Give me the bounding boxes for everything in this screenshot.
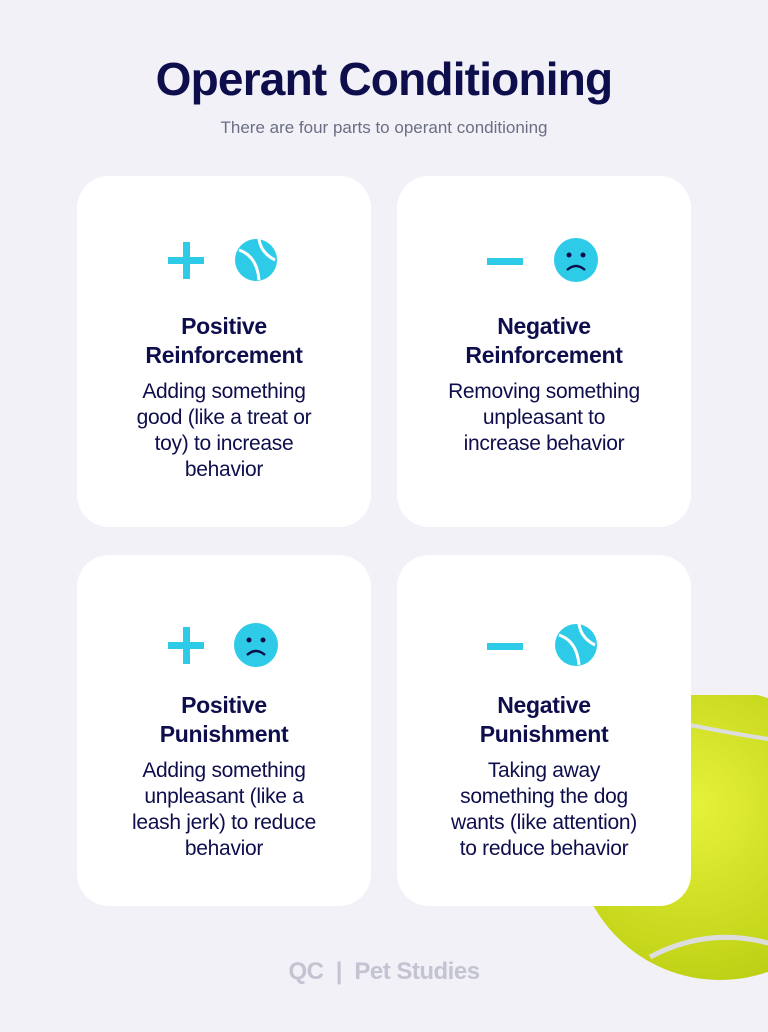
heading: Reinforcement [465, 342, 623, 368]
body text: behavior [185, 837, 263, 860]
body text [132, 759, 316, 860]
body text: increase behavior [464, 432, 624, 455]
body text: Taking away [488, 759, 600, 782]
decorative tennis ball [594, 695, 768, 980]
panel: positive punishment [77, 555, 371, 906]
icons: minus and ball [487, 624, 597, 666]
body text [137, 380, 312, 481]
heading [160, 692, 288, 747]
body text: behavior [185, 458, 263, 481]
panel: positive reinforcement [77, 176, 371, 527]
heading [480, 692, 608, 747]
body text: toy) to increase [155, 432, 293, 455]
panel: negative punishment [397, 555, 691, 906]
body text: Adding something [142, 759, 306, 782]
body text: leash jerk) to reduce [132, 811, 316, 834]
heading: Punishment [480, 721, 608, 747]
subtitle: There are four parts to operant conditioning [220, 118, 547, 137]
title: Operant Conditioning [156, 53, 612, 105]
body text: Adding something [142, 380, 306, 403]
heading: Reinforcement [145, 342, 303, 368]
panel: negative reinforcement [397, 176, 691, 527]
body text: Removing something [448, 380, 640, 403]
heading: Positive [181, 692, 267, 718]
body text: unpleasant to [483, 406, 605, 429]
heading: Negative [497, 692, 591, 718]
heading: Punishment [160, 721, 288, 747]
logo: QC | Pet Studies [288, 958, 480, 985]
icons: plus and sad face [168, 623, 278, 667]
body text: something the dog [460, 785, 628, 808]
heading [465, 313, 623, 368]
heading: Positive [181, 313, 267, 339]
heading [145, 313, 303, 368]
body text: unpleasant (like a [144, 785, 304, 808]
body text: wants (like attention) [451, 811, 637, 834]
body text: to reduce behavior [460, 837, 628, 860]
body text [448, 380, 640, 455]
body text [451, 759, 637, 860]
icons: minus and sad face [487, 238, 598, 282]
icons: plus and ball [168, 239, 277, 281]
heading: Negative [497, 313, 591, 339]
body text: good (like a treat or [137, 406, 311, 429]
